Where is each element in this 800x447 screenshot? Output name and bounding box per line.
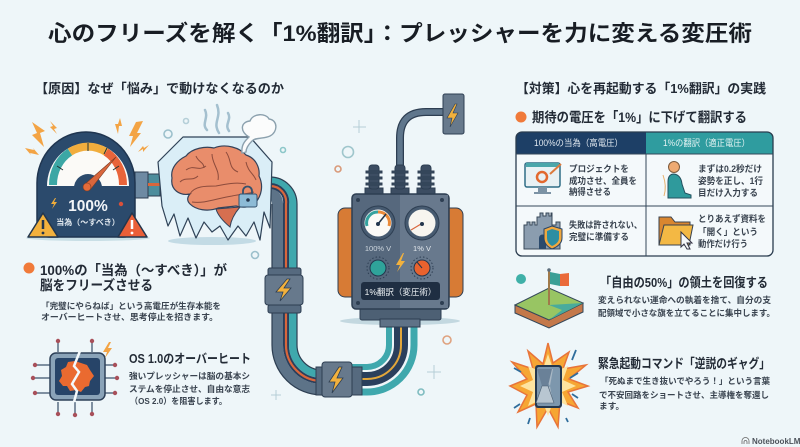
table: 100 percent versus 1 percent: 成功させ、全員を: [569, 175, 637, 186]
gauge: 100 percent pressure: [26, 132, 160, 241]
icons: sparks around gauge: [25, 118, 149, 155]
text: freedom 50 percent: 変えられない運命への執着を捨て、自分の支: [598, 294, 771, 305]
icon: steam cloud: [242, 115, 276, 153]
text: emergency command: 緊急起動コマンド「逆説のギャグ」: [598, 356, 770, 371]
connector: middle lightning joint: [265, 268, 303, 313]
icon: emergency switch: [510, 343, 588, 427]
text: OS overheat: （OS 2.0）を阻害します。: [130, 395, 227, 406]
text: OS overheat: [129, 352, 251, 406]
gauge: 100 percent pressure: 100%: [68, 198, 108, 215]
icon: warning triangle red: [118, 213, 147, 237]
illustration: transformer box: 1% V: [413, 244, 431, 253]
nameplate: 1%翻訳（変圧術）: [365, 287, 436, 297]
table: 100 percent versus 1 percent: とりあえず資料を: [698, 213, 766, 224]
section: 100 percent should: 「完璧にやらねば」という高電圧が生存本能を: [41, 300, 221, 311]
cable: brain to transformer: [270, 177, 414, 395]
table: 100 percent versus 1 percent: プロジェクトを: [569, 164, 629, 174]
icon: padlock: [239, 187, 257, 207]
illustration: frozen brain: [158, 105, 276, 245]
icon: monitor: [525, 163, 561, 194]
section: 100 percent should: [24, 262, 227, 322]
table: 100 percent versus 1 percent: 完璧に準備する: [569, 231, 629, 242]
icon: knob orange: [411, 257, 433, 279]
dial: 100 percent V: [361, 206, 395, 240]
table: 100 percent versus 1 percent: [516, 132, 773, 256]
text: freedom 50 percent: 配領域で小さな旗を立てることに集中します。: [598, 307, 775, 318]
icon: castle and shield: [524, 213, 562, 249]
heading: causes: 【原因】なぜ「悩み」で動けなくなるのか: [35, 81, 284, 96]
illustration: transformer box: [338, 94, 464, 327]
icon: warning triangle yellow: [28, 213, 58, 237]
icon: knob teal: [367, 257, 389, 279]
heading: countermeasures: 【対策】心を再起動する「1%翻訳」の実践: [516, 81, 766, 96]
title: 心のフリーズを解く「1%翻訳」：プレッシャーを力に変える変圧術: [48, 21, 752, 46]
text: emergency command: [598, 356, 770, 411]
table: 100 percent versus 1 percent: まずは0.2秒だけ: [698, 163, 762, 174]
text: freedom 50 percent: [598, 275, 775, 318]
text: freedom 50 percent: 「自由の50%」の領土を回復する: [600, 275, 768, 290]
table: 100 percent versus 1 percent: 「開く」という: [698, 227, 758, 237]
gauge: 100 percent pressure: 当為（〜すべき）: [56, 217, 120, 227]
icon: territory flag: [515, 268, 583, 328]
section: 100 percent should: オーバーヒートさせ、思考停止を招きます。: [41, 311, 218, 322]
icon: person posture: [663, 162, 691, 198]
table: 100 percent versus 1 percent: 納得させる: [569, 186, 611, 197]
icon: folder and cursor: [659, 217, 693, 249]
decorative bubbles: [164, 118, 451, 400]
table: 100 percent versus 1 percent: 失敗は許されない、: [569, 219, 642, 230]
table: 100 percent versus 1 percent: 1%の翻訳（適正電圧）: [663, 137, 750, 148]
nameplate: [361, 282, 440, 300]
text: OS overheat: ステムを停止させ、自由な意志: [129, 383, 250, 394]
icon: broken chip: [31, 339, 119, 417]
section: 100 percent should: 100%の「当為（〜すべき）」が: [40, 262, 227, 278]
dial: 1 percent V: [405, 206, 439, 240]
icon: box lightning: [396, 253, 405, 272]
watermark: NotebookLM: NotebookLM: [752, 437, 800, 446]
text: emergency command: ます。: [599, 401, 624, 411]
text: emergency command: 「死ぬまで生き抜いでやろう！」という言葉: [600, 375, 770, 386]
connector: bottom lightning joint: [316, 362, 362, 397]
table: 100 percent versus 1 percent: 目だけ入力する: [698, 187, 758, 198]
table: 100 percent versus 1 percent: 100%の当為（高電圧）: [534, 137, 623, 148]
icon: top lightning plate: [443, 94, 464, 134]
table: 100 percent versus 1 percent: 動作だけ行う: [698, 238, 748, 249]
text: OS overheat: 強いプレッシャーは脳の基本シ: [129, 370, 250, 381]
table: 100 percent versus 1 percent: 姿勢を正し、1行: [698, 175, 763, 186]
text: emergency command: で不安回路をショートさせ、主導権を奪還し: [599, 389, 769, 400]
text: OS overheat: OS 1.0のオーバーヒート: [129, 352, 251, 366]
section: lower voltage: 期待の電圧を「1%」に下げて翻訳する: [532, 109, 747, 125]
section: 100 percent should: 脳をフリーズさせる: [40, 277, 153, 293]
illustration: transformer box: 100% V: [365, 244, 391, 253]
